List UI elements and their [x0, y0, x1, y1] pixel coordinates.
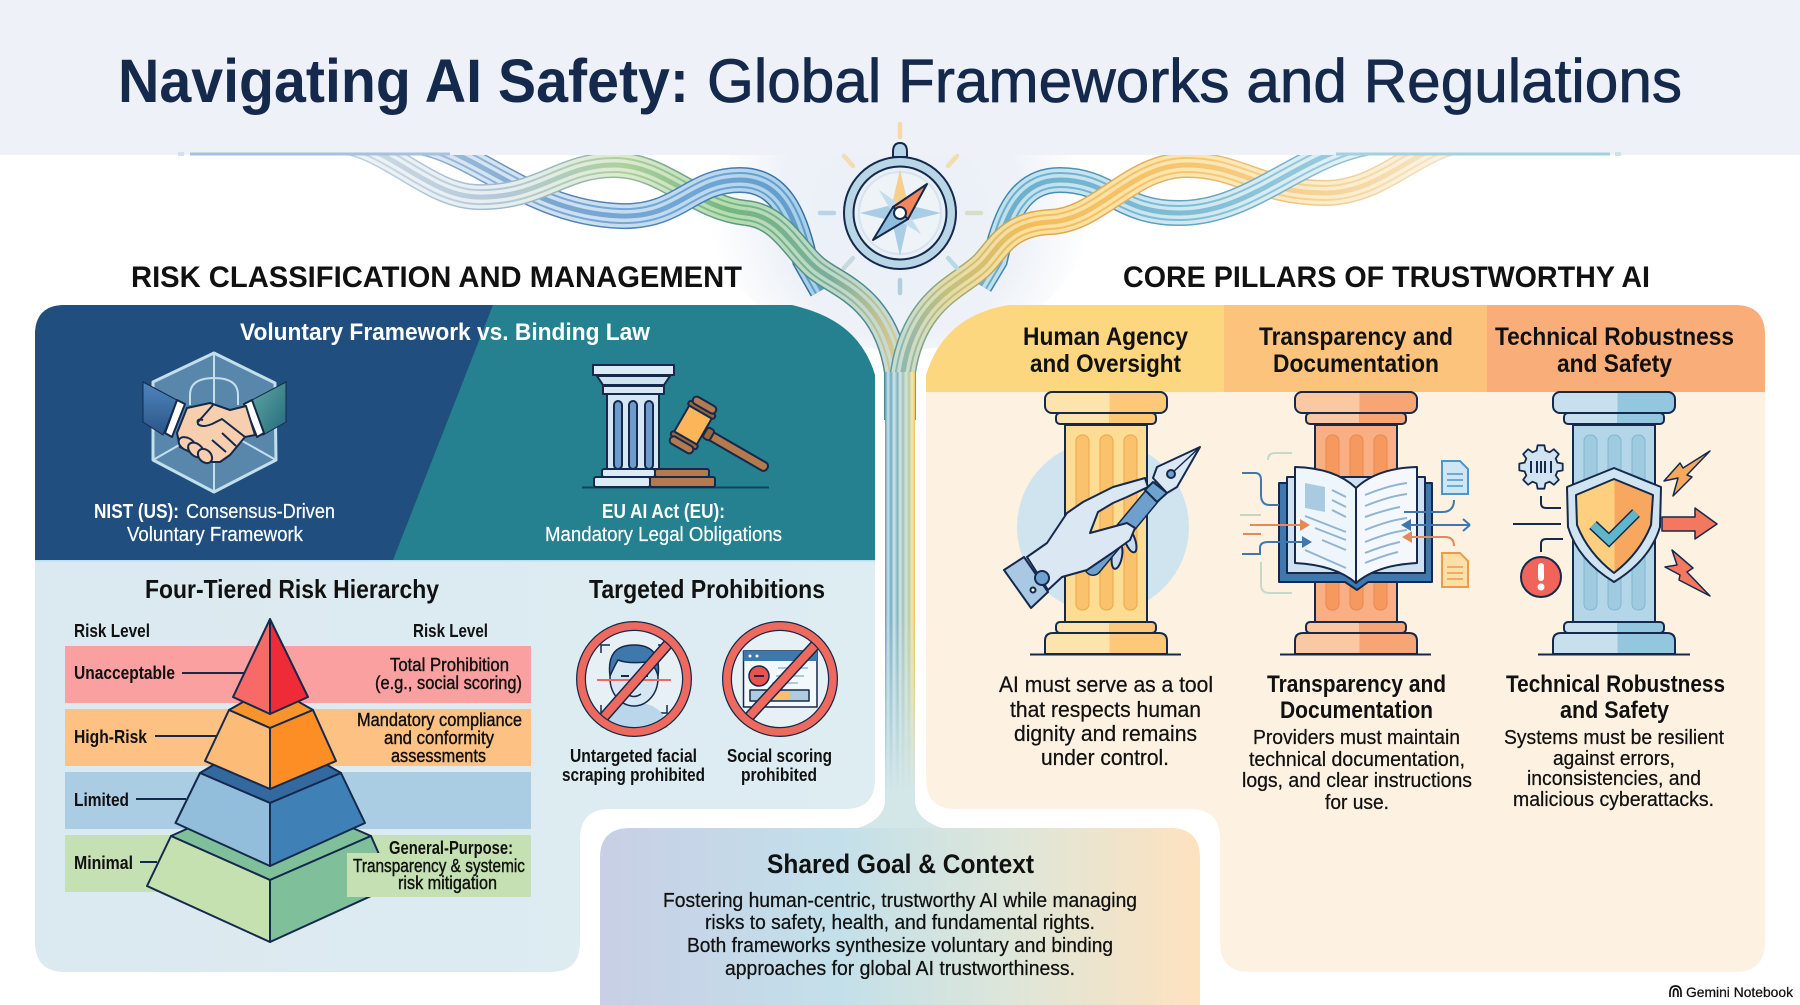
heading: core pillars: CORE PILLARS OF TRUSTWORTHY AI: [1123, 261, 1650, 294]
right risk descriptions: Risk Level: [413, 621, 488, 641]
panel: voluntary framework vs binding law: [35, 305, 875, 560]
pillar 2 description: [1242, 671, 1472, 814]
pillar 3 description: Systems must be resilient: [1504, 727, 1724, 749]
left flowing ribbons: [330, 140, 897, 420]
shared goal body: risks to safety, health, and fundamental rights.: [705, 912, 1095, 934]
pillar 3 description: against errors,: [1553, 748, 1675, 770]
right risk descriptions: assessments: [391, 746, 486, 766]
title: [118, 47, 1682, 115]
shared goal body: approaches for global AI trustworthiness.: [725, 958, 1075, 980]
nist label: Voluntary Framework: [127, 524, 304, 546]
pillar 1 description: dignity and remains: [1014, 721, 1197, 746]
pillar header band: Human Agency: [1023, 323, 1188, 351]
icon: column and gavel: [582, 365, 781, 491]
pillar header band: [926, 305, 1765, 392]
eu ai act label: EU AI Act (EU):: [602, 501, 725, 523]
left risk labels: Unacceptable: [74, 663, 175, 683]
prohibition captions: prohibited: [741, 765, 817, 785]
left risk labels: [74, 621, 244, 873]
shared goal body: Both frameworks synthesize voluntary and binding: [687, 935, 1113, 957]
pillar header band: and Oversight: [1030, 350, 1182, 378]
panel heading: Voluntary Framework vs. Binding Law: [240, 319, 650, 346]
pillar header band: Technical Robustness: [1495, 323, 1734, 351]
compass background glow: [710, 80, 1090, 350]
prohibition captions: Untargeted facial: [570, 746, 697, 766]
risk bands: [65, 646, 531, 892]
icon: handshake on hexagon: [143, 353, 286, 492]
right risk descriptions: Mandatory compliance: [357, 710, 522, 730]
right risk descriptions: risk mitigation: [398, 873, 497, 893]
heading: four-tiered risk hierarchy: Four-Tiered Risk Hierarchy: [145, 574, 439, 604]
nist label: NIST (US):: [94, 501, 179, 523]
pillar 2 description: for use.: [1325, 792, 1389, 814]
shared goal body: [663, 890, 1137, 980]
pillar 3 description: inconsistencies, and: [1527, 768, 1701, 790]
eu ai act label: Mandatory Legal Obligations: [545, 524, 782, 546]
title: Navigating AI Safety:: [118, 47, 689, 115]
pillar 2 description: Providers must maintain: [1253, 727, 1460, 749]
pillar 1 description: AI must serve as a tool: [999, 672, 1213, 697]
nist label: Consensus-Driven: [186, 501, 335, 523]
pillar 2 description: Transparency and: [1267, 671, 1446, 698]
prohibition captions: [562, 746, 832, 785]
heading: risk classification: RISK CLASSIFICATION AND MANAGEMENT: [131, 261, 742, 294]
title band: [0, 0, 1800, 156]
pillar 3 description: [1504, 671, 1725, 811]
icon: pillar with hand and pen: [1004, 392, 1200, 654]
eu ai act label: [545, 501, 782, 546]
general-purpose box: [347, 853, 531, 897]
pillar 2 description: technical documentation,: [1249, 749, 1465, 771]
right risk descriptions: [353, 621, 525, 893]
pillar 1 description: under control.: [1041, 745, 1169, 770]
right flowing ribbons: [903, 140, 1470, 420]
shared goal body: Fostering human-centric, trustworthy AI while managing: [663, 890, 1137, 912]
pillar 3 description: malicious cyberattacks.: [1513, 789, 1714, 811]
left risk labels: High-Risk: [74, 727, 148, 747]
right risk descriptions: and conformity: [384, 728, 494, 748]
watermark: gemini notebook: Gemini Notebook: [1686, 984, 1794, 1000]
pyramid chart: [147, 619, 393, 942]
right risk descriptions: Total Prohibition: [390, 655, 509, 675]
panel: core pillars: [926, 305, 1765, 972]
title: Global Frameworks and Regulations: [707, 47, 1682, 115]
pillar 1 description: that respects human: [1010, 697, 1201, 722]
pillar 1 description: [999, 672, 1213, 770]
left risk labels: Limited: [74, 790, 129, 810]
prohibition captions: scraping prohibited: [562, 765, 705, 785]
central converging stream: [855, 372, 945, 829]
icon: compass: [820, 124, 981, 293]
right risk descriptions: General-Purpose:: [389, 838, 513, 858]
prohibition captions: Social scoring: [727, 746, 832, 766]
pillar 3 description: and Safety: [1560, 697, 1670, 724]
left risk labels: Minimal: [74, 853, 133, 873]
right risk descriptions: Transparency & systemic: [353, 856, 525, 876]
left risk labels: Risk Level: [74, 621, 150, 641]
icon: pillar with shield: [1513, 392, 1717, 654]
pillar header band: Documentation: [1273, 350, 1439, 378]
right risk descriptions: (e.g., social scoring): [375, 673, 522, 693]
icon: facial scraping prohibited: [581, 626, 687, 732]
pillar 3 description: Technical Robustness: [1506, 671, 1725, 698]
icon: pillar with open book: [1240, 392, 1470, 654]
shared goal heading: Shared Goal & Context: [767, 849, 1034, 879]
nist label: [94, 501, 335, 546]
icon: social scoring prohibited: [727, 626, 833, 732]
heading: targeted prohibitions: Targeted Prohibitions: [589, 574, 825, 604]
panel: risk hierarchy and prohibitions: [35, 560, 875, 972]
pillar 2 description: Documentation: [1280, 697, 1433, 724]
pillar header band: and Safety: [1557, 350, 1672, 378]
pillar 2 description: logs, and clear instructions: [1242, 770, 1472, 792]
pillar header band: Transparency and: [1259, 323, 1453, 351]
panel: shared goal and context: [600, 828, 1200, 1005]
